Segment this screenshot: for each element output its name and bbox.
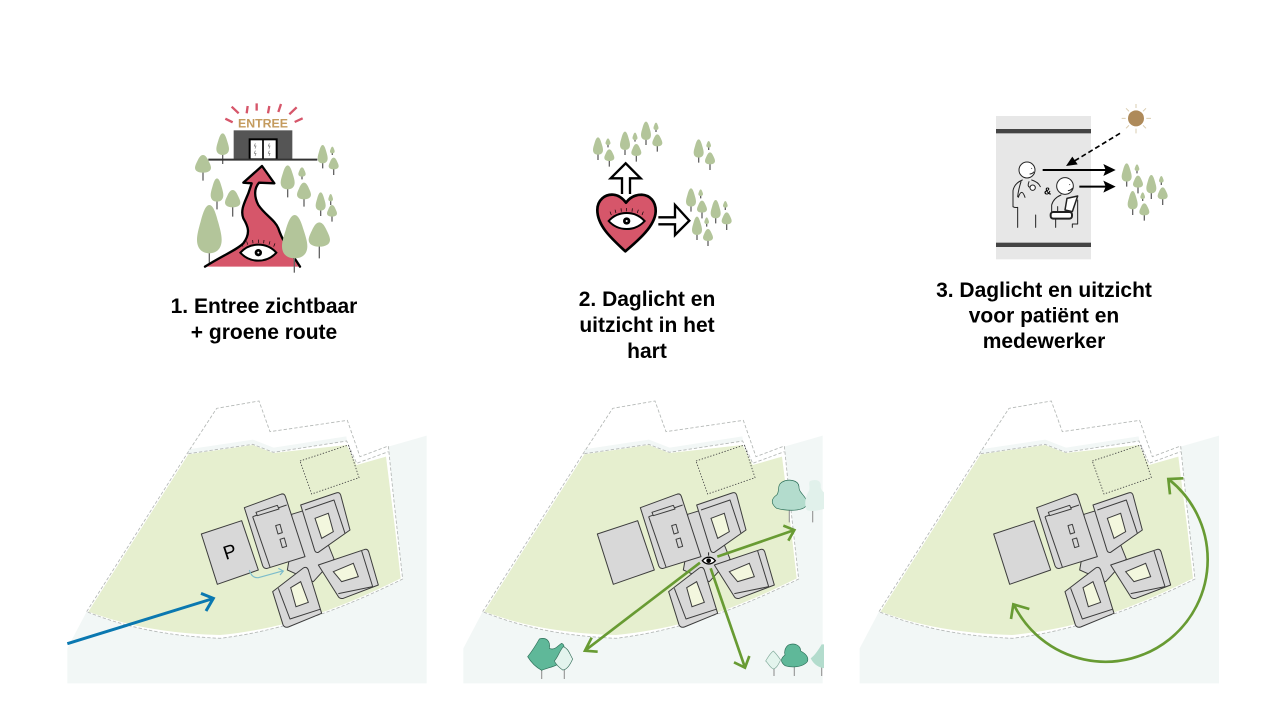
- title: step 3: voor patiënt en: [969, 304, 1119, 328]
- wall: [996, 116, 1091, 259]
- icon: entrance with red route arrow and trees: [195, 103, 339, 273]
- icon: building: [208, 130, 317, 160]
- panel: site plan 1: [67, 401, 427, 683]
- site plan: [67, 401, 427, 683]
- view arrows: [1043, 164, 1116, 193]
- title: step 2: uitzicht in het: [579, 314, 715, 337]
- arrow right: [658, 205, 689, 235]
- icon: foreground tree: [282, 215, 307, 273]
- heart: [597, 195, 656, 251]
- title: step 2: 2. Daglicht en: [579, 288, 715, 311]
- icon: red rays: [225, 103, 303, 122]
- site plan: [860, 401, 1219, 683]
- green circular arrow: [1011, 478, 1208, 662]
- green view arrows: [585, 526, 794, 668]
- site plan: [463, 401, 823, 683]
- blue approach arrow: [67, 593, 213, 644]
- title: step 3: 3. Daglicht en uitzicht: [936, 279, 1152, 302]
- icon: red route arrow: [205, 166, 300, 267]
- view arrows and trees: [528, 480, 827, 679]
- icon: heart with eye, arrows and trees: [593, 122, 732, 251]
- panel: site plan 2: [463, 401, 827, 683]
- parking label: P: [221, 541, 240, 565]
- sun: [1122, 104, 1151, 133]
- title: step 3: medewerker: [983, 330, 1105, 353]
- patient: [1051, 178, 1078, 227]
- ampersand: &: [1044, 186, 1051, 197]
- icon: eye on route: [240, 240, 276, 261]
- title: step 1: 1. Entree zichtbaar: [171, 295, 357, 318]
- trees: [528, 480, 827, 679]
- small teal route arrow: [249, 568, 283, 578]
- eye marker: [702, 552, 715, 564]
- panel: site plan 3: [860, 401, 1219, 683]
- arrow up: [611, 163, 641, 194]
- title: step 2: hart: [627, 340, 667, 363]
- title: step 1: + groene route: [191, 321, 337, 344]
- eye in heart: [609, 208, 645, 229]
- dashed sunlight arrow: [1066, 133, 1120, 166]
- trees: [593, 122, 732, 246]
- icon: doctor and patient by window with sun and trees: [996, 104, 1168, 259]
- doctor: [1013, 162, 1040, 227]
- trees: [1122, 163, 1168, 221]
- icon: entree sign: ENTREE: [238, 116, 288, 130]
